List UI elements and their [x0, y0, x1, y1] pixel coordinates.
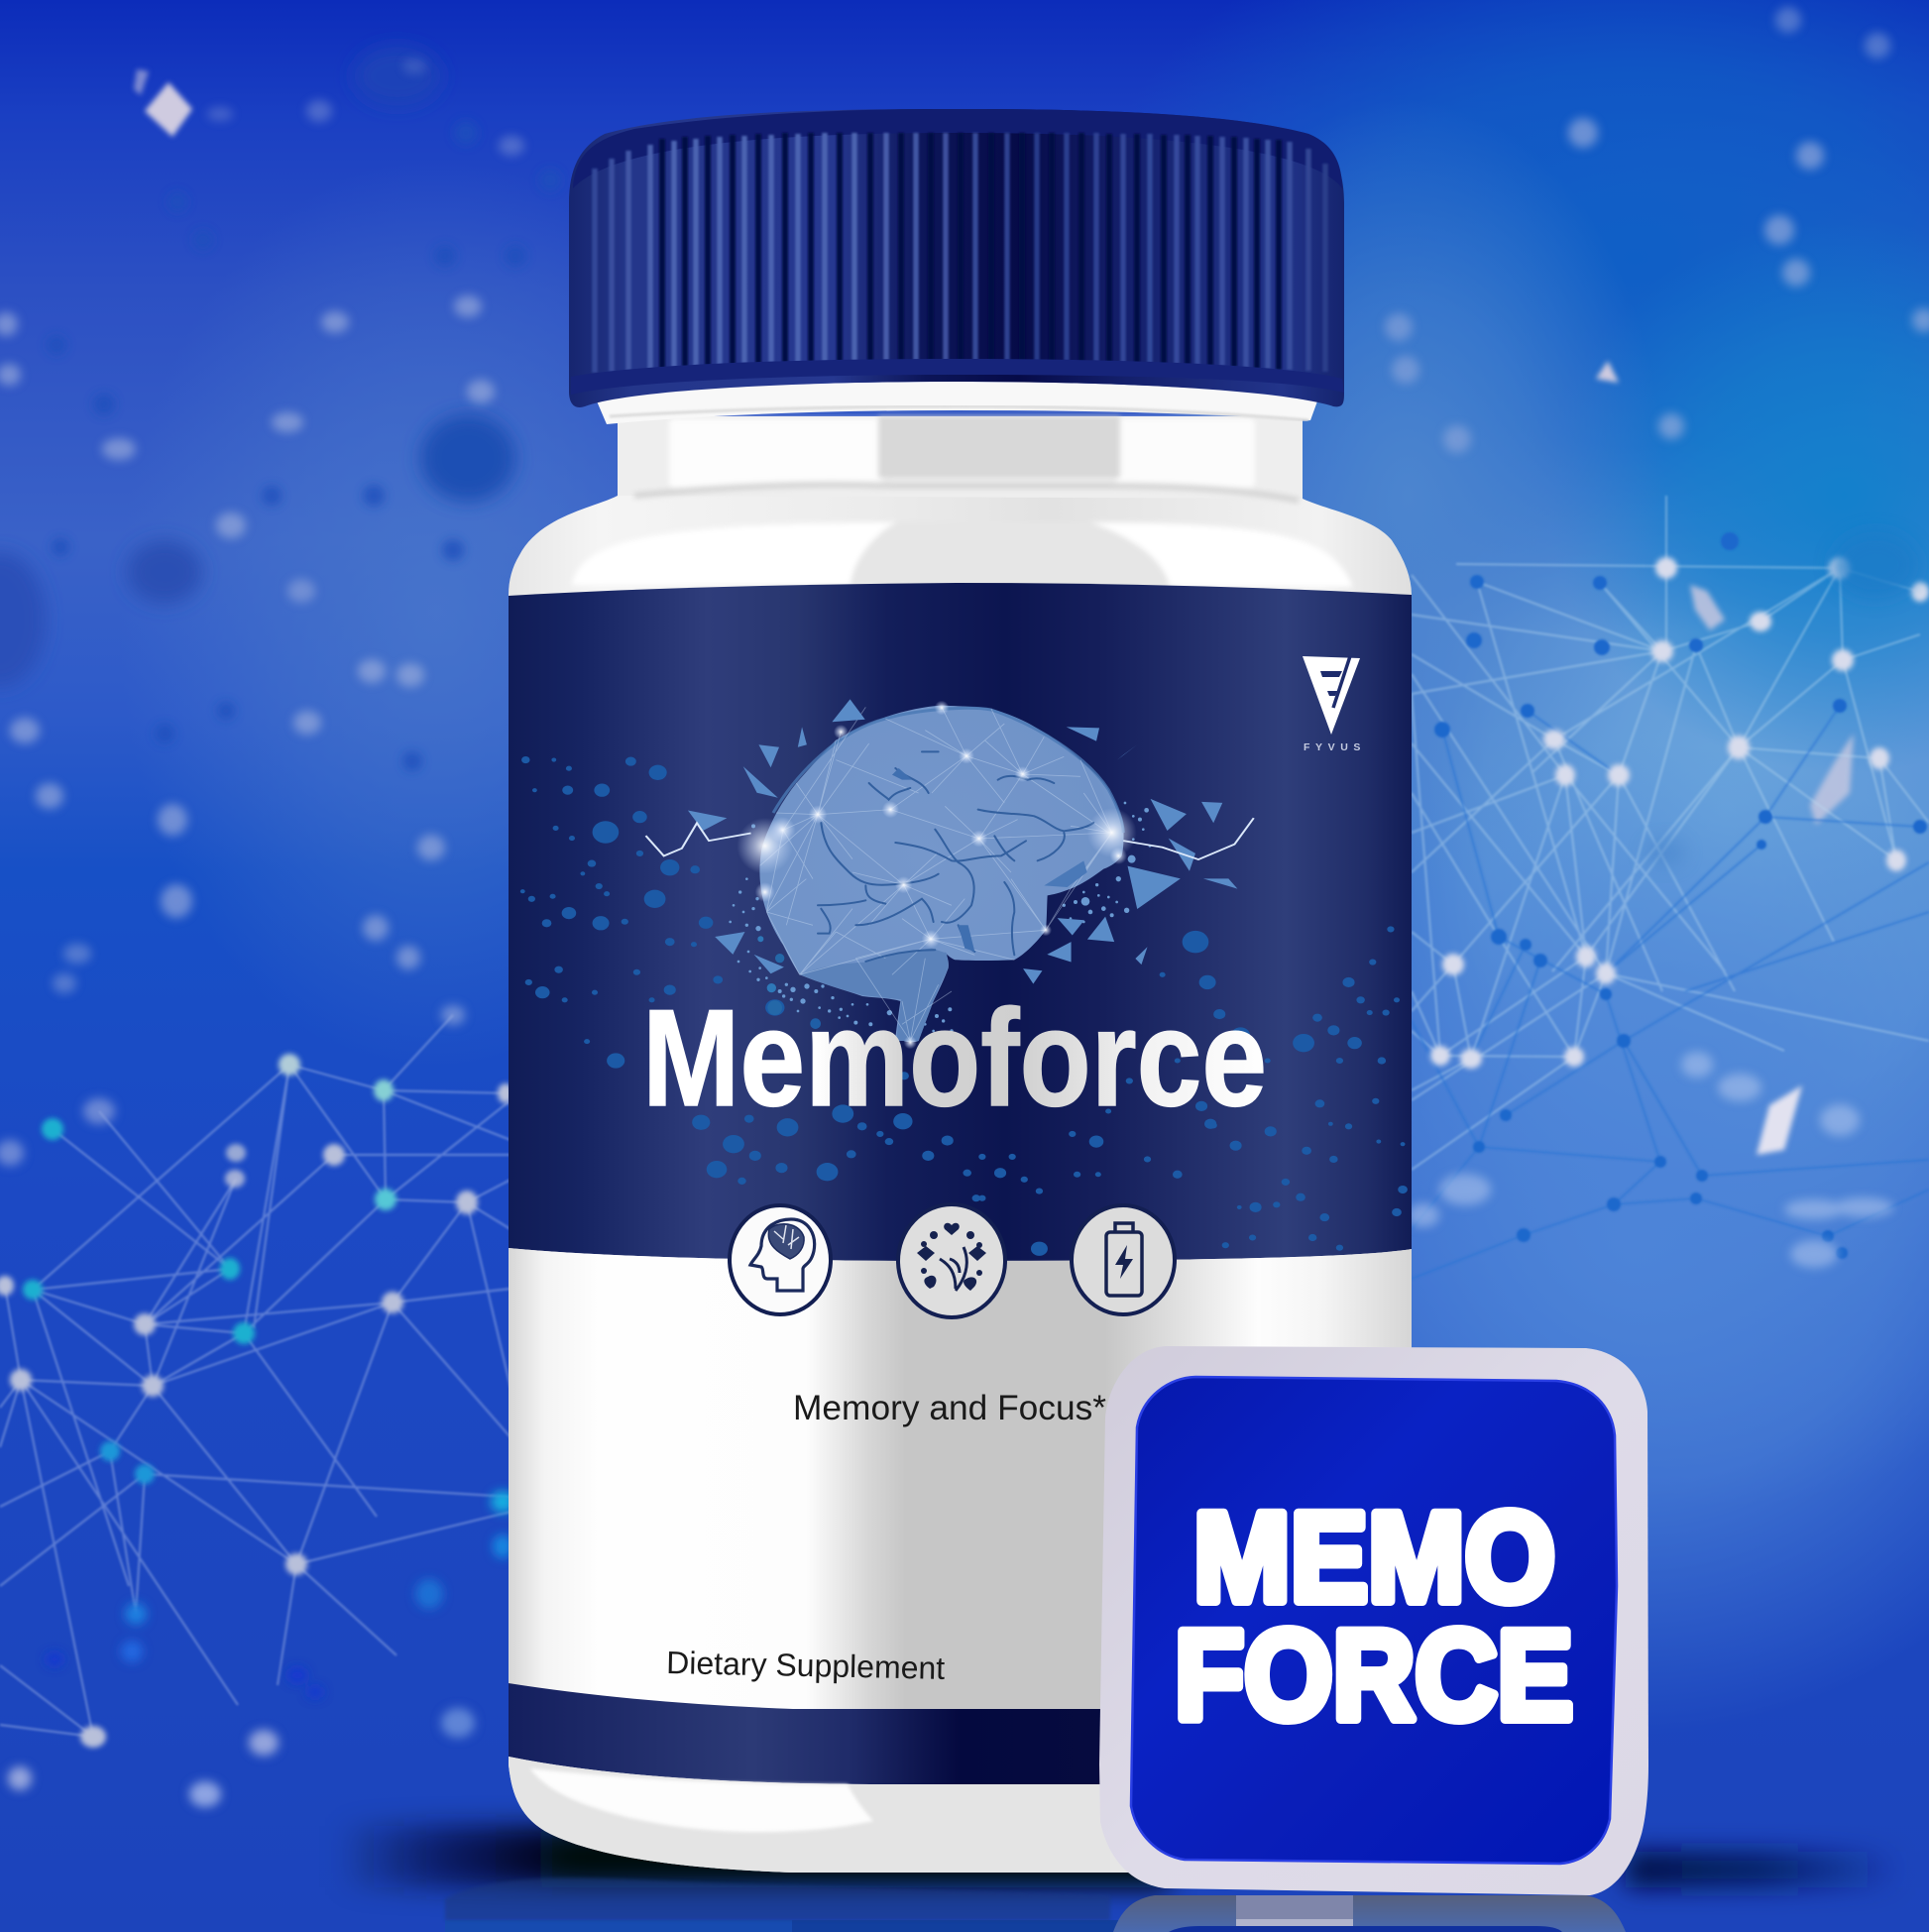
label dots [520, 756, 1408, 1256]
bottle [509, 109, 1412, 1873]
icon: head with brain badge [730, 1205, 831, 1314]
bottle cap [569, 109, 1344, 407]
icon: battery badge [1072, 1205, 1175, 1314]
supplement label: Dietary Supplement [666, 1645, 946, 1686]
network: right cluster [1408, 496, 1929, 1279]
label bottom stripe [509, 1683, 1110, 1784]
brain web lines [760, 707, 1112, 1041]
badge reflection [1113, 1895, 1626, 1932]
icon: brain illustration [729, 701, 1151, 1049]
icon: glass shards and lightning [646, 699, 1254, 983]
cap ribs: dark grooves [662, 133, 1279, 370]
badge wordmark: MEMO [1193, 1487, 1555, 1629]
logo: FYVUS: FYVUS [1304, 741, 1366, 753]
particle dots around brain [729, 802, 1151, 1033]
badge wordmark: FORCE [1175, 1605, 1573, 1747]
label top panel [509, 583, 1412, 1261]
icon: pale shards in the background [134, 69, 1854, 1155]
logo: FYVUS [1303, 656, 1366, 753]
brain lobes [759, 706, 1124, 1042]
cerebellum [801, 949, 948, 1041]
faint top dots and dark spots [0, 7, 1929, 993]
badge: MEMO FORCE [1099, 1346, 1648, 1895]
bottle base [509, 1757, 870, 1873]
tagline: Memory and Focus* [793, 1389, 1106, 1427]
cap ribs: highlights [595, 133, 1325, 373]
floor: dark horizon and reflections [337, 1826, 1903, 1932]
badge inner panel [1131, 1377, 1617, 1864]
white label section [509, 1248, 1412, 1715]
icon: figure with hearts badge [898, 1204, 1005, 1317]
brain sparkle points [737, 701, 1137, 1049]
badge wordmark [1175, 1487, 1573, 1747]
brain sulci [818, 751, 1093, 962]
network: left cluster [0, 1005, 514, 1807]
bottle neck and shoulder [509, 382, 1412, 1873]
product name: Memoforce [642, 981, 1267, 1135]
